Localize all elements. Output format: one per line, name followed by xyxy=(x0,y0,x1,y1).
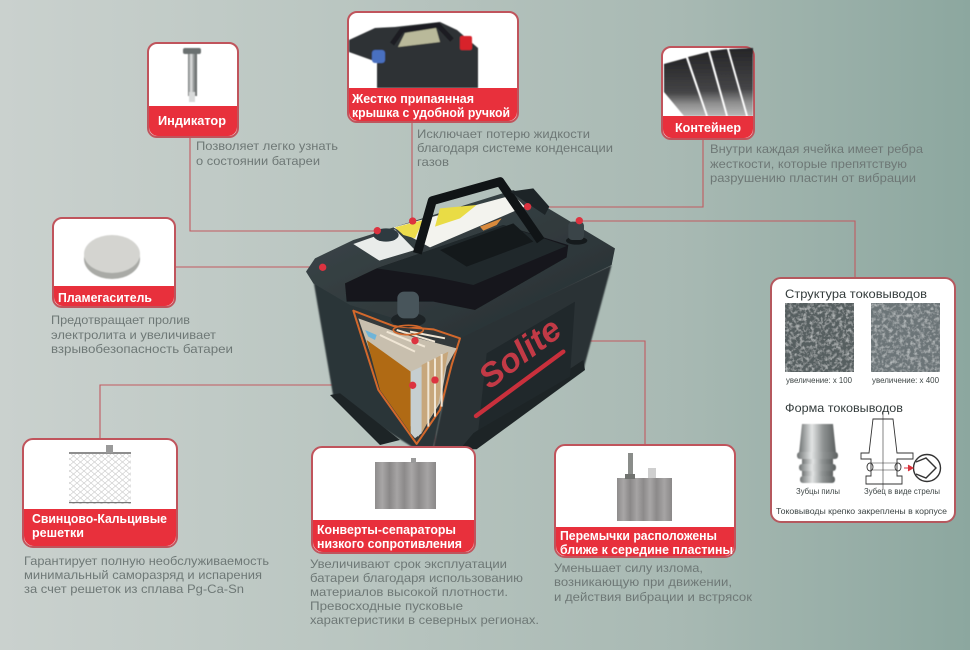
text: flame arrester xyxy=(51,313,233,356)
yellow top label xyxy=(393,195,525,247)
carrying handle xyxy=(417,182,541,253)
heading: flame arrester: Пламегаситель xyxy=(58,291,152,305)
heading: container: Контейнер xyxy=(675,121,741,135)
text: straps: Уменьшает силу излома, xyxy=(554,561,703,575)
caption: sawtooth: Зубцы пилы xyxy=(796,487,840,496)
text: container xyxy=(710,142,923,185)
heading: separators: низкого сопротивления xyxy=(317,537,462,551)
panel: separators xyxy=(312,447,475,553)
heading: separators: Конверты-сепараторы xyxy=(317,523,456,537)
text: lid xyxy=(417,127,613,169)
text: container: жесткости, которые препятствую xyxy=(710,157,907,171)
heading: lead-calcium grids: решетки xyxy=(32,526,84,540)
icon: separator plate xyxy=(375,458,436,509)
panel: terminal structure xyxy=(771,278,955,522)
heading: indicator: Индикатор xyxy=(158,114,226,128)
connector lines xyxy=(100,122,855,447)
text: container: Внутри каждая ячейка имеет ребра xyxy=(710,142,923,156)
text: indicator: о состоянии батареи xyxy=(196,154,320,168)
battery right side face xyxy=(433,265,612,448)
text: straps: и действия вибрации и встрясок xyxy=(554,590,753,604)
text: separators: характеристики в северных регионах. xyxy=(310,613,539,627)
micrograph x100 xyxy=(785,303,854,372)
text: lead-calcium grids: минимальный саморазряд и испарения xyxy=(24,568,262,582)
text: separators: Увеличивают срок эксплуатации xyxy=(310,557,507,571)
battery illustration xyxy=(306,182,615,449)
battery lid xyxy=(306,190,615,338)
icon: red pointer xyxy=(904,465,913,471)
panel: lead-calcium grids xyxy=(23,439,177,547)
right terminal xyxy=(566,222,587,245)
base flange xyxy=(330,360,585,449)
panel: straps xyxy=(555,445,735,557)
text: lead-calcium grids: за счет решеток из сплава Pg-Ca-Sn xyxy=(24,582,244,596)
text: lead-calcium grids: Гарантирует полную необслуживаемость xyxy=(24,554,269,568)
heading: straps: Перемычки расположены xyxy=(560,529,717,543)
text: flame arrester: Предотвращает пролив xyxy=(51,313,190,327)
heading: structure: Структура токовыводов xyxy=(785,287,927,301)
icon: disc xyxy=(84,235,140,279)
icon: plate with straps xyxy=(617,453,672,521)
text: separators xyxy=(310,557,539,627)
battery left side face xyxy=(313,280,457,448)
text: indicator xyxy=(196,139,338,168)
icon: small battery xyxy=(349,22,478,88)
text: straps: возникающую при движении, xyxy=(554,575,732,589)
Solite logo panel xyxy=(478,302,575,430)
text: lid: Исключает потерю жидкости xyxy=(417,127,590,141)
panel: lid xyxy=(348,12,518,122)
text: separators: материалов высокой плотности. xyxy=(310,585,508,599)
text: container: разрушению пластин от вибрации xyxy=(710,171,916,185)
caption x400: увеличение: х 400 xyxy=(872,376,940,385)
heading: separators xyxy=(317,523,462,551)
Solite logo: Solite xyxy=(472,311,569,396)
red logo band xyxy=(476,352,563,416)
icon: arrow terminal diagram xyxy=(861,412,940,490)
heading: lid: крышка с удобной ручкой xyxy=(352,106,510,120)
text: flame arrester: электролита и увеличивает xyxy=(51,328,217,342)
footer note: Токовыводы крепко закреплены в корпусе xyxy=(776,507,948,516)
front terminal xyxy=(391,292,426,335)
heading: lead-calcium grids xyxy=(32,512,167,540)
panel: container xyxy=(662,47,754,139)
heading: straps: ближе к середине пластины xyxy=(560,543,733,557)
caption: arrow tooth: Зубец в виде стрелы xyxy=(864,487,940,496)
text: flame arrester: взрывобезопасность батареи xyxy=(51,342,233,356)
text: straps xyxy=(554,561,753,604)
heading: lid: Жестко припаянная xyxy=(351,92,474,106)
rear corner cover xyxy=(510,188,549,215)
callout dots xyxy=(319,203,583,389)
micrograph x400 xyxy=(871,303,940,372)
text: separators: батареи благодаря использованию xyxy=(310,571,523,585)
heading: straps xyxy=(560,529,733,557)
icon: indicator probe xyxy=(183,48,201,102)
icon: container ribs xyxy=(664,48,753,116)
heading: lid xyxy=(351,92,510,120)
text: lead-calcium grids xyxy=(24,554,269,596)
indicator cap xyxy=(373,228,399,242)
icon: grid xyxy=(69,445,131,504)
caption x100: увеличение: х 100 xyxy=(786,376,853,385)
text: separators: Превосходные пусковые xyxy=(310,599,463,613)
heading: form: Форма токовыводов xyxy=(785,401,903,415)
text: indicator: Позволяет легко узнать xyxy=(196,139,338,153)
panel: indicator xyxy=(148,43,238,137)
cut-away section xyxy=(353,311,460,444)
panel: flame arrester xyxy=(53,218,175,307)
text: lid: газов xyxy=(417,155,449,169)
text: lid: благодаря системе конденсации xyxy=(417,141,613,155)
icon: sawtooth terminal xyxy=(797,424,838,483)
raised handle block xyxy=(345,225,568,310)
heading: lead-calcium grids: Свинцово-Кальцивые xyxy=(32,512,167,526)
white indicator label xyxy=(353,229,415,261)
